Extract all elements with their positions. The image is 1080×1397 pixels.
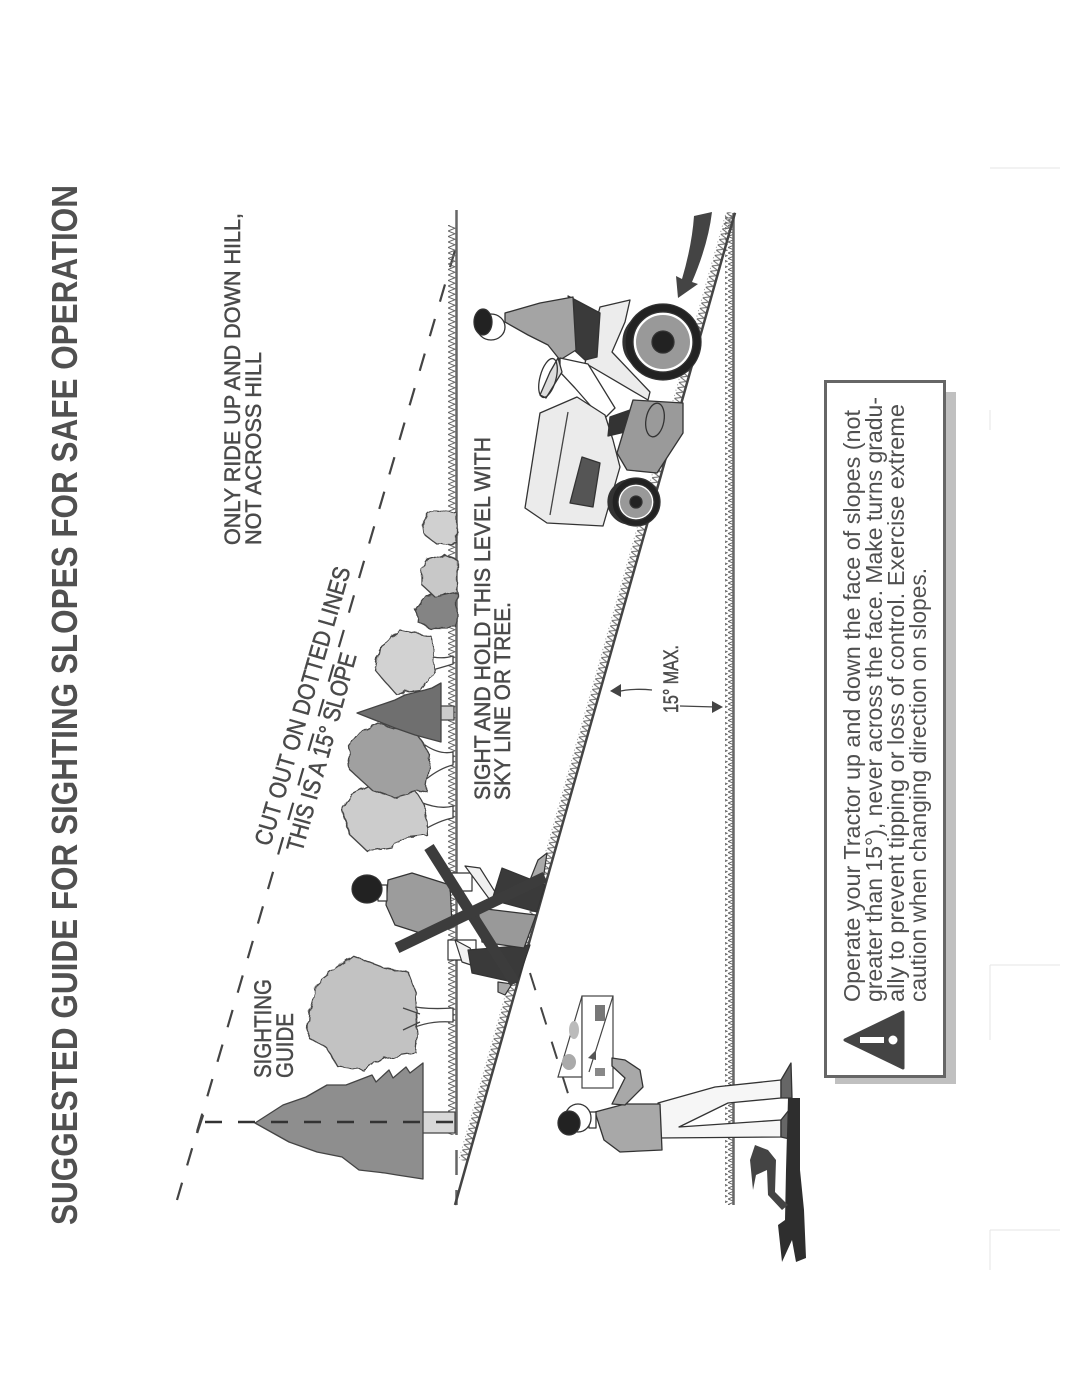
faint scan marks: [990, 168, 1060, 1270]
label: 15 degrees max with arrows: [610, 645, 723, 713]
dashed 15 degree cut line: [177, 240, 458, 1200]
label: this is a 15 degree slope: THIS IS A 15° SLOPE: [282, 650, 363, 855]
curved direction arrow near person: [750, 1145, 788, 1210]
warning text: Operate your Tractor up and down the face of slopes (not: [839, 409, 865, 1002]
title: SUGGESTED GUIDE FOR SIGHTING SLOPES FOR SAFE OPERATION: [44, 185, 85, 1225]
label: only ride up and down hill: ONLY RIDE UP AND DOWN HILL,: [220, 213, 245, 545]
standing person: [558, 1058, 794, 1152]
lower ground line: [725, 213, 734, 1205]
label: cut out on dotted lines: CUT OUT ON DOTTED LINES: [250, 564, 356, 849]
dashed sighting line: [530, 973, 571, 1103]
warning text: ally to prevent tipping or loss of control. Exercise extreme: [883, 404, 909, 1002]
down-slope arrow: [676, 212, 712, 298]
label: 15 degrees max with arrows: 15° MAX.: [660, 645, 683, 713]
label: sighting guide: SIGHTING: [250, 979, 277, 1078]
sighting card held by person: [558, 996, 613, 1088]
warning box: [826, 382, 956, 1084]
label: sighting guide: GUIDE: [272, 1013, 299, 1078]
label: sight and hold: SIGHT AND HOLD THIS LEVEL WITH: [470, 437, 495, 800]
warning text: caution when changing direction on slopes.: [905, 568, 931, 1002]
background tree group: [342, 510, 457, 852]
crossed-out person on bench: [352, 847, 547, 995]
label: only ride up and down hill: [220, 213, 266, 545]
label: sight and hold: SKY LINE OR TREE.: [490, 602, 515, 800]
pine tree with sight line: [197, 1063, 455, 1179]
label: sight and hold: [470, 437, 515, 800]
warning text: greater than 15°), never across the face. Make turns gradu-: [861, 397, 887, 1002]
label: sighting guide: [250, 979, 299, 1078]
label: only ride up and down hill: NOT ACROSS HILL: [241, 352, 266, 545]
slope line: [446, 210, 735, 1205]
tractor and rider: [474, 296, 701, 526]
ground shadow: [778, 1098, 806, 1262]
round tree: [308, 956, 453, 1070]
icon: warning triangle: [845, 1012, 903, 1068]
upper ground line: [448, 210, 456, 1205]
warning text: [839, 397, 931, 1002]
